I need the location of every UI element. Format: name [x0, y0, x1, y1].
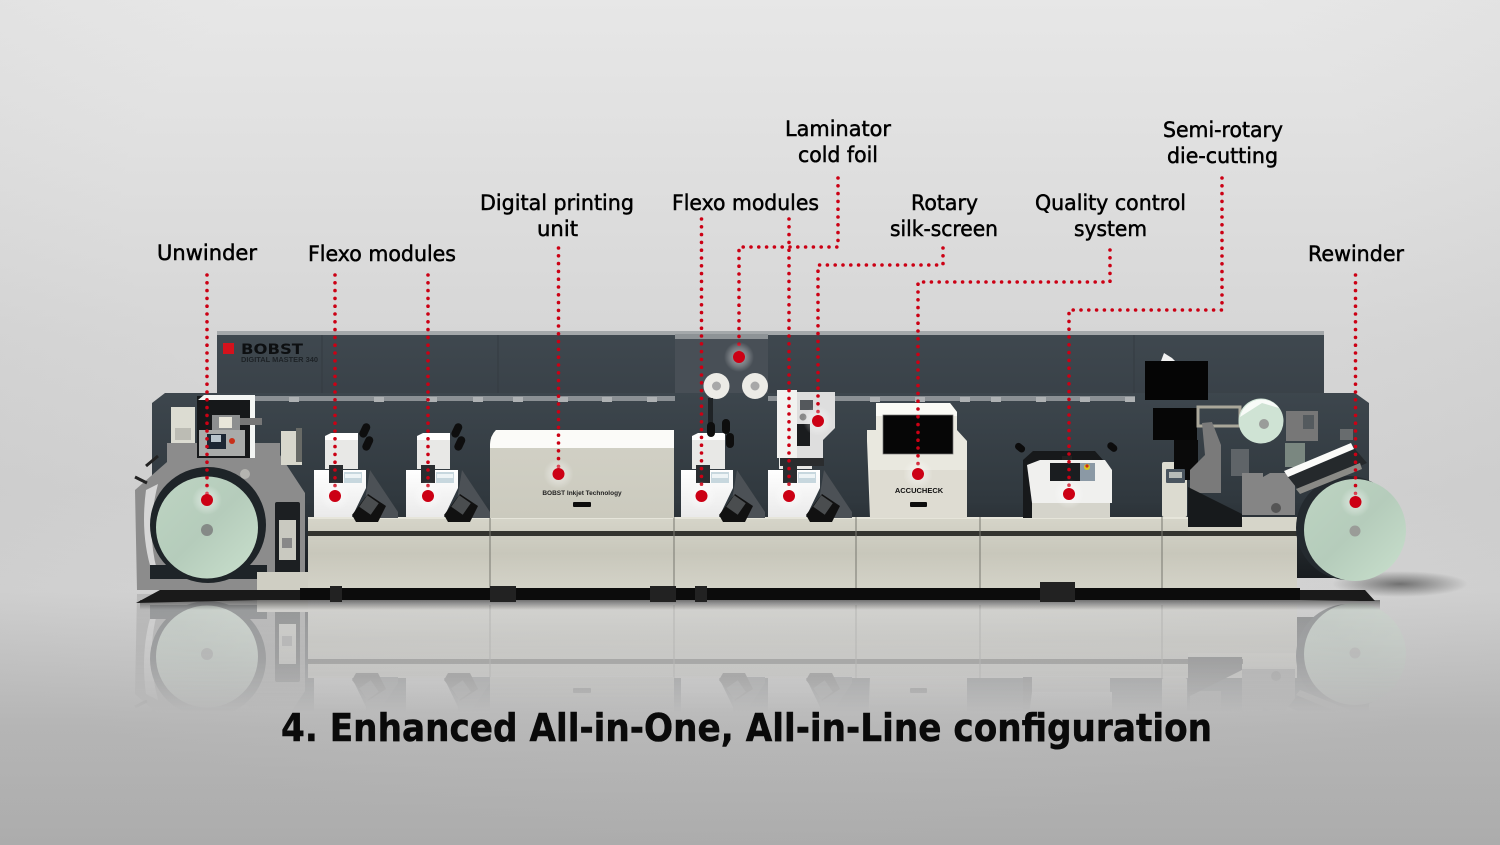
leader: quality control	[918, 250, 1110, 474]
marker: unwinder	[192, 485, 222, 515]
modules: flexo, digital, accucheck and quality bodies	[314, 403, 1187, 522]
leader: unwinder	[205, 275, 209, 500]
quality control details	[1014, 441, 1119, 481]
leader: flexo 1	[333, 275, 337, 496]
digital printing unit lettering: BOBST Inkjet Technology	[542, 490, 622, 497]
logo: bobst: BOBST	[241, 342, 304, 358]
label: digital printing unit: unit	[537, 217, 578, 241]
logo: bobst: DIGITAL MASTER 340	[241, 357, 318, 364]
marker: rewinder	[1340, 487, 1370, 517]
machine base	[300, 517, 1300, 602]
marker: flexo 4	[774, 481, 804, 511]
label: quality control system: system	[1074, 217, 1147, 241]
label: rotary silk-screen: Rotary	[911, 191, 978, 215]
label: laminator cold foil	[785, 117, 891, 167]
monitors	[1145, 353, 1208, 480]
label: digital printing unit: Digital printing	[480, 191, 634, 215]
label: flexo modules left: Flexo modules	[308, 242, 456, 266]
back panel	[217, 331, 1324, 402]
logo: bobst	[223, 342, 318, 364]
guide rail	[255, 396, 1135, 402]
module: rotary silk-screen	[777, 390, 835, 466]
title: 4. Enhanced All-in-One, All-in-Line configuration	[281, 706, 1212, 750]
leader: rotary silk-screen	[818, 248, 943, 421]
marker: die-cutting	[1054, 479, 1084, 509]
leader: laminator	[739, 178, 838, 357]
machine reflection	[136, 594, 1360, 700]
label: digital printing unit	[480, 191, 634, 241]
floor reflection shade	[140, 600, 1380, 610]
marker: digital printing	[544, 459, 574, 489]
label: quality control system	[1035, 191, 1186, 241]
label: laminator cold foil: cold foil	[798, 143, 878, 167]
marker: laminator	[724, 342, 754, 372]
label: rotary silk-screen	[890, 191, 998, 241]
leader: digital printing	[557, 248, 560, 474]
callout leaders	[207, 178, 1356, 502]
module: rewinder	[1188, 398, 1406, 581]
leader: flexo 4	[787, 219, 791, 496]
printing machine	[135, 331, 1406, 603]
marker: flexo 2	[413, 481, 443, 511]
label: rotary silk-screen: silk-screen	[890, 217, 998, 241]
marker: flexo 1	[320, 481, 350, 511]
leader: semi-rotary	[1069, 178, 1222, 494]
floor shadow right	[1332, 571, 1468, 597]
label: semi-rotary die-cutting: Semi-rotary	[1163, 118, 1283, 142]
label: semi-rotary die-cutting	[1163, 118, 1283, 168]
leader: flexo 2	[426, 275, 430, 496]
accucheck lettering: ACCUCHECK	[895, 486, 944, 495]
label: laminator cold foil: Laminator	[785, 117, 891, 141]
leader: rewinder	[1354, 275, 1357, 502]
label: rewinder: Rewinder	[1308, 242, 1404, 266]
marker: flexo 3	[686, 481, 716, 511]
control pillar screen	[1166, 469, 1185, 483]
leader: flexo 3	[700, 219, 703, 496]
floor plate	[136, 590, 1375, 603]
label: quality control system: Quality control	[1035, 191, 1186, 215]
label: unwinder: Unwinder	[157, 241, 257, 265]
label: semi-rotary die-cutting: die-cutting	[1167, 144, 1278, 168]
marker: accucheck	[903, 459, 933, 489]
marker: rotary silk-screen	[803, 406, 833, 436]
callout markers	[192, 342, 1370, 517]
laminator rolls	[704, 373, 768, 448]
label: flexo modules right: Flexo modules	[672, 191, 819, 215]
lower panel	[152, 393, 1369, 590]
module: unwinder	[135, 395, 308, 590]
